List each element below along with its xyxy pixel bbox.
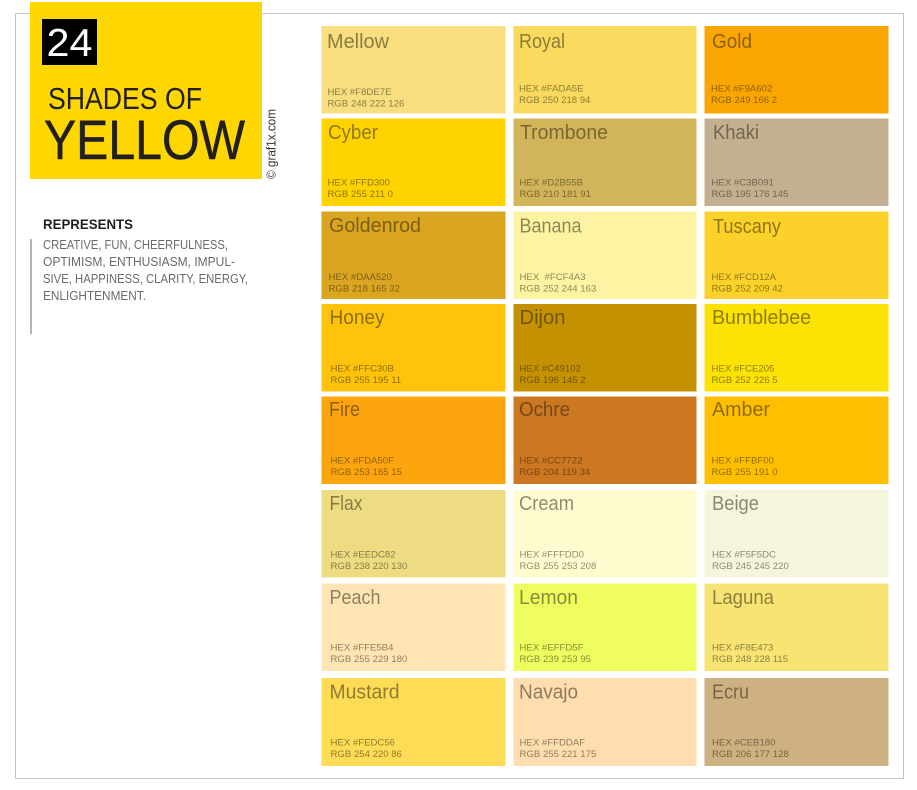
heading: shades of: SHADES OF [48,81,202,116]
swatch: Lemon: Lemon [519,586,578,609]
swatch: Khaki [704,118,888,206]
swatch: Goldenrod: RGB 218 165 32 [328,284,400,294]
swatch: Goldenrod: HEX #DAA520 [328,272,392,283]
swatch: Navajo [514,678,696,766]
swatch: Laguna: RGB 248 228 115 [712,654,788,665]
credit: graf1x.com: © graf1x.com [264,109,278,179]
swatch: Ecru: Ecru [712,680,749,704]
swatch: Honey: Honey [330,306,385,329]
swatch: Dijon: RGB 196 145 2 [520,375,586,386]
swatch: Bumblebee: RGB 252 226 5 [712,375,778,386]
swatch: Gold [704,26,888,114]
swatch: Fire [322,396,506,484]
swatch: Flax: HEX #EEDC82 [330,550,396,560]
swatch: Fire: RGB 253 165 15 [330,467,402,478]
swatch: Ecru [704,678,888,766]
swatch: Honey: RGB 255 195 11 [330,375,401,386]
swatch: Ochre: RGB 204 119 34 [520,467,591,478]
swatch: Flax: Flax [330,492,363,515]
swatch: Trombone: RGB 210 181 91 [520,189,591,200]
swatch: Cream: RGB 255 253 208 [520,561,596,572]
swatch: Beige: Beige [712,492,759,515]
swatch: Honey [322,304,506,392]
swatch: Cyber: Cyber [328,121,378,144]
swatch: Mellow: RGB 248 222 126 [328,98,404,110]
swatch: Beige [704,490,888,578]
swatch: Amber [704,396,888,484]
swatch: Lemon [514,584,696,671]
swatch: Cream: HEX #FFFDD0 [520,550,584,560]
swatch: Gold: Gold [712,30,752,53]
swatch: Ecru: HEX #CEB180 [712,738,775,748]
swatch: Banana: RGB 252 244 163 [520,284,596,294]
swatch: Gold: HEX #F9A602 [711,84,772,94]
swatch: Navajo: RGB 255 221 175 [520,749,596,760]
swatch: Royal: RGB 250 218 94 [519,95,591,106]
swatch: Khaki: Khaki [713,121,759,144]
swatch: Peach: Peach [330,586,380,609]
swatch: Amber: RGB 255 191 0 [712,467,778,478]
swatch: Mustard: RGB 254 220 86 [330,749,402,760]
swatch: Mustard: HEX #FEDC56 [330,738,395,748]
swatch: Honey: HEX #FFC30B [330,364,394,374]
swatch: Tuscany [704,212,888,299]
swatch: Ochre: Ochre [519,398,570,421]
swatch: Laguna [704,584,888,671]
swatch: Peach: RGB 255 229 180 [330,654,407,665]
swatch: Tuscany: Tuscany [713,215,782,238]
swatch: Trombone [514,118,696,206]
swatch: Navajo: Navajo [519,680,578,704]
swatch: Peach [322,584,506,671]
swatch: Trombone: Trombone [520,121,608,144]
swatch: Amber: Amber [712,398,770,421]
accent rule [30,239,32,334]
swatch: Lemon: RGB 239 253 95 [520,654,591,665]
swatch: Cyber: RGB 255 211 0 [328,189,393,200]
badge: 24: 24 [46,22,92,65]
represents text: CREATIVE, FUN, CHEERFULNESS, [43,238,228,252]
swatch: Mustard [322,678,506,766]
swatch: Beige: RGB 245 245 220 [712,561,789,572]
swatch: Dijon: Dijon [520,306,566,329]
swatch: Beige: HEX #F5F5DC [712,550,776,560]
swatch: Goldenrod [322,212,506,299]
swatch: Amber: HEX #FFBF00 [712,456,774,466]
swatch: Mellow: HEX #F8DE7E [328,87,392,98]
swatch: Fire: HEX #FDA50F [330,456,394,466]
represents text [43,238,248,303]
swatch: Dijon [514,304,696,392]
swatch: Navajo: HEX #FFDDAF [520,738,585,748]
swatch: Khaki: RGB 195 176 145 [712,189,788,200]
swatch: Banana: Banana [520,214,582,238]
swatch: Bumblebee: HEX #FCE205 [712,364,774,374]
swatch: Dijon: HEX #C49102 [520,364,581,374]
swatch: Khaki: HEX #C3B091 [712,178,774,188]
swatch: Gold: RGB 249 166 2 [711,95,777,106]
swatch: Royal [514,26,696,114]
represents text: OPTIMISM, ENTHUSIASM, IMPUL- [43,255,235,269]
swatch: Flax: RGB 238 220 130 [330,561,407,572]
swatch: Trombone: HEX #D2B55B [520,178,583,188]
represents text: ENLIGHTENMENT. [43,289,146,303]
swatch: Goldenrod: Goldenrod [329,214,421,237]
represents text: SIVE, HAPPINESS, CLARITY, ENERGY, [43,272,248,286]
swatch: Mellow: Mellow [327,30,389,53]
swatch: Cyber: HEX #FFD300 [328,178,390,188]
swatch: Peach: HEX #FFE5B4 [330,642,394,654]
swatch: Flax [322,490,506,578]
title block [30,2,262,179]
swatch: Banana: HEX #FCF4A3 [520,272,586,283]
swatch: Cyber [322,118,506,206]
swatch: Banana [514,212,696,299]
swatch: Bumblebee [704,304,888,392]
swatch: Cream [514,490,696,578]
swatch: Ochre [514,396,696,484]
swatch: Mustard: Mustard [330,680,400,704]
swatch: Royal: HEX #FADA5E [519,84,584,94]
swatch: Tuscany: HEX #FCD12A [712,272,777,283]
swatch: Royal: Royal [519,30,565,53]
swatch: Lemon: HEX #EFFD5F [520,642,584,654]
swatch: Mellow [322,26,506,114]
swatch: Ochre: HEX #CC7722 [520,456,582,466]
swatch: Bumblebee: Bumblebee [712,306,811,329]
swatch: Ecru: RGB 206 177 128 [712,749,789,760]
swatch: Tuscany: RGB 252 209 42 [712,284,783,294]
represents heading: REPRESENTS [43,216,133,232]
swatch: Fire: Fire [329,398,360,421]
heading: yellow: YELLOW [44,108,245,171]
swatch: Laguna: HEX #F8E473 [712,642,773,654]
swatch: Cream: Cream [519,492,574,515]
swatch: Laguna: Laguna [712,586,775,609]
